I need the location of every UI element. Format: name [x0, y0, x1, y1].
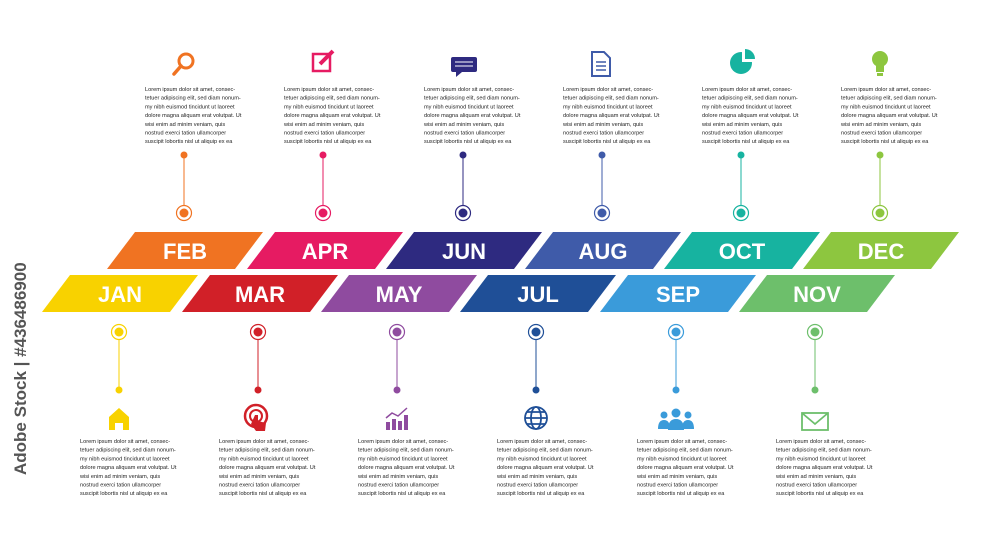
panel: JUN	[423, 57, 521, 220]
icon: chat	[451, 57, 477, 77]
band: JUN: JUN	[442, 239, 486, 264]
band: JAN: JAN	[98, 282, 142, 307]
band: SEP	[600, 275, 756, 312]
band: MAR	[182, 275, 338, 312]
icon: magnifier	[174, 54, 193, 74]
band: NOV: NOV	[793, 282, 841, 307]
icon: globe	[525, 407, 547, 429]
panel: FEB	[144, 54, 242, 220]
panel: APR	[283, 51, 381, 220]
icon: document	[592, 52, 610, 76]
band: FEB	[107, 232, 263, 269]
icon: people	[658, 408, 694, 430]
panel: JUL	[496, 324, 594, 497]
panel: AUG	[562, 52, 660, 220]
timeline bottom row	[42, 275, 895, 312]
timeline top row	[107, 232, 959, 269]
icon: house	[109, 408, 129, 430]
band: SEP: SEP	[656, 282, 700, 307]
band: DEC	[803, 232, 959, 269]
panel: DEC	[840, 51, 938, 220]
band: JUN	[386, 232, 542, 269]
band: DEC: DEC	[858, 239, 904, 264]
band: JUL: JUL	[517, 282, 559, 307]
band: MAY: MAY	[376, 282, 423, 307]
band: MAR: MAR	[235, 282, 285, 307]
panel: MAY	[357, 324, 455, 497]
band: AUG	[525, 232, 681, 269]
band: OCT: OCT	[719, 239, 766, 264]
panel: SEP	[636, 324, 734, 497]
watermark id: Adobe Stock | #436486900	[11, 262, 30, 475]
band: JUL	[460, 275, 616, 312]
panel: JAN	[79, 324, 177, 497]
band: MAY	[321, 275, 477, 312]
band: NOV	[739, 275, 895, 312]
icon: edit	[313, 51, 333, 71]
panel: OCT	[701, 49, 799, 220]
band: APR	[247, 232, 403, 269]
icon: pie chart	[730, 49, 755, 74]
panel: NOV	[775, 324, 873, 497]
icon: envelope	[802, 413, 828, 430]
panel: MAR	[218, 324, 316, 497]
band: JAN	[42, 275, 198, 312]
band: AUG: AUG	[579, 239, 627, 264]
icon: bulb	[872, 51, 888, 76]
icon: bar chart	[386, 408, 408, 430]
band: OCT	[664, 232, 820, 269]
band: APR: APR	[302, 239, 348, 264]
band: FEB: FEB	[163, 239, 207, 264]
icon: touch target	[245, 405, 267, 431]
